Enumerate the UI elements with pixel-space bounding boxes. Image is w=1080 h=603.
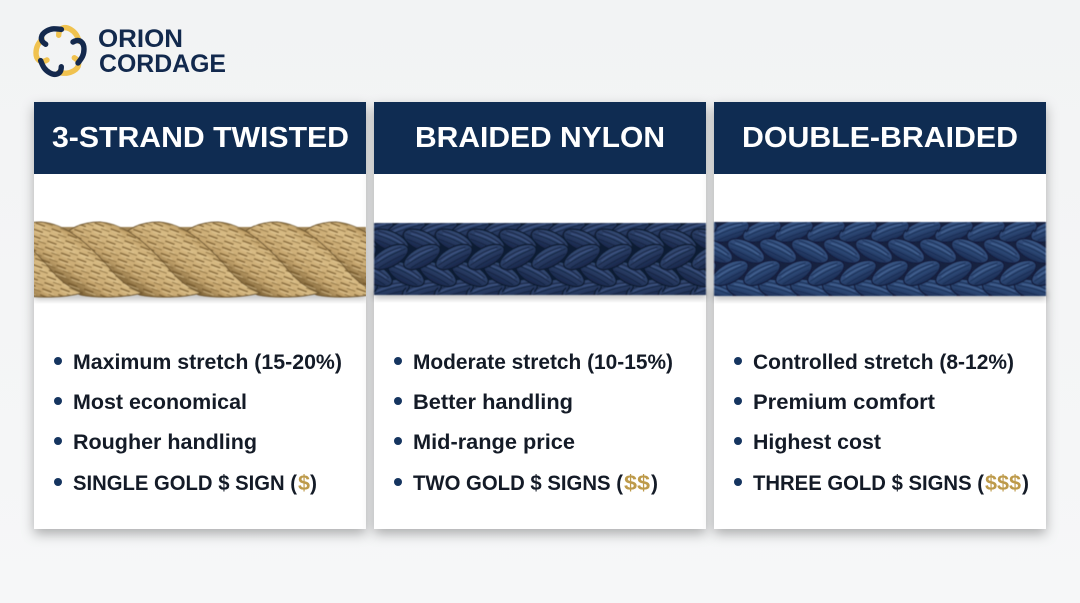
rope photo: navy braided rope	[374, 223, 706, 298]
feature list: Highest cost	[753, 431, 881, 454]
feature list: TWO GOLD $ SIGNS (	[413, 472, 623, 495]
card background	[714, 102, 1046, 529]
icon: interlaced rope ring	[36, 24, 84, 78]
feature list: THREE GOLD $ SIGNS (	[753, 472, 984, 495]
feature list: $$	[624, 472, 650, 495]
feature list: )	[651, 472, 658, 495]
rope photo: blue double-braided rope	[714, 222, 1046, 299]
panel: double-braided	[714, 102, 1046, 529]
heading: double-braided	[714, 102, 1046, 174]
feature list: Maximum stretch (15-20%)	[73, 351, 342, 374]
heading: 3-strand twisted: 3-STRAND TWISTED	[52, 122, 349, 154]
rope photo: tan twisted rope	[34, 220, 366, 303]
card background	[34, 102, 366, 529]
panel: 3-strand twisted	[27, 100, 373, 541]
feature list: Premium comfort	[753, 391, 935, 414]
feature list: $$$	[985, 472, 1021, 495]
heading: double-braided: DOUBLE-BRAIDED	[742, 122, 1018, 154]
feature list: )	[1022, 472, 1029, 495]
feature list	[734, 351, 1029, 495]
feature list: Moderate stretch (10-15%)	[413, 351, 673, 374]
card background	[374, 102, 706, 529]
heading: braided nylon: BRAIDED NYLON	[415, 122, 665, 154]
feature list: Controlled stretch (8-12%)	[753, 351, 1014, 374]
logo: Orion Cordage	[36, 24, 226, 78]
feature list: Most economical	[73, 391, 247, 414]
wordmark	[98, 25, 226, 78]
feature list: SINGLE GOLD $ SIGN (	[73, 472, 297, 495]
heading: braided nylon	[374, 102, 706, 174]
heading: 3-strand twisted	[34, 102, 366, 174]
feature list: Mid-range price	[413, 431, 575, 454]
feature list: Rougher handling	[73, 431, 257, 454]
wordmark: ORION	[98, 25, 183, 53]
feature list: $	[298, 472, 310, 495]
panel: braided nylon	[374, 102, 706, 529]
feature list	[394, 351, 673, 495]
wordmark: CORDAGE	[99, 50, 226, 78]
feature list: )	[310, 472, 317, 495]
feature list: Better handling	[413, 391, 573, 414]
feature list	[54, 351, 342, 495]
